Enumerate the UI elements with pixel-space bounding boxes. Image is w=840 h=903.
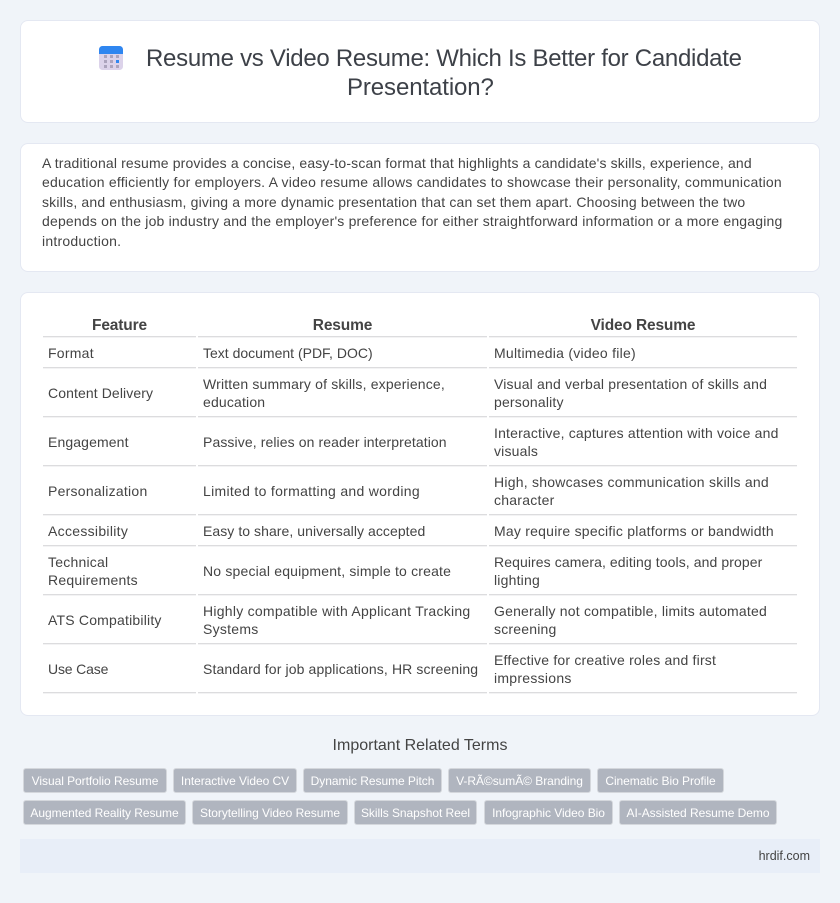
- ats compatibility: video resume: Generally not compatible, limits automated: [494, 603, 767, 619]
- tag: infographic video bio: Infographic Video Bio: [492, 806, 605, 820]
- tag: cinematic bio profile: Cinematic Bio Profile: [605, 774, 716, 788]
- intro text: depends on the job industry and the employer's preference for either straightforward information or a more engaging: [42, 213, 782, 229]
- content delivery: video resume: Visual and verbal presentation of skills and: [494, 376, 767, 392]
- tag: storytelling video resume: [192, 800, 348, 825]
- tag: storytelling video resume: Storytelling Video Resume: [200, 806, 340, 820]
- engagement: video resume: [494, 425, 779, 459]
- row: technical requirements: Requirements: [48, 572, 138, 588]
- intro text: education efficiently for employers. A video resume allows candidates to showcase their personality, communication: [42, 174, 782, 190]
- table header: feature: Feature: [92, 317, 147, 334]
- icon: calendar: [99, 46, 123, 70]
- row: technical requirements: Technical: [48, 554, 108, 570]
- content delivery: video resume: personality: [494, 394, 564, 410]
- row: format: Format: [48, 345, 94, 361]
- content delivery: video resume: [494, 376, 767, 410]
- row: ats compatibility: ATS Compatibility: [48, 612, 162, 628]
- technical requirements: video resume: [494, 554, 762, 588]
- intro text: introduction.: [42, 233, 121, 249]
- row: engagement: Engagement: [48, 434, 129, 450]
- personalization: resume: Limited to formatting and wording: [203, 483, 420, 499]
- footer bar: [20, 839, 820, 873]
- title: Resume vs Video Resume: Which Is Better for Candidate: [146, 45, 742, 72]
- accessibility: resume: Easy to share, universally accepted: [203, 523, 425, 539]
- ats compatibility: resume: [203, 603, 470, 637]
- tag: skills snapshot reel: [354, 800, 477, 825]
- tag: interactive video cv: [173, 768, 297, 793]
- intro text: skills, and enthusiasm, giving a more dynamic presentation that can set them apart. Choosing between the two: [42, 194, 745, 210]
- title: Presentation?: [347, 74, 494, 101]
- content delivery: resume: [203, 376, 445, 410]
- tag: visual portfolio resume: Visual Portfolio Resume: [32, 774, 158, 788]
- tag: dynamic resume pitch: Dynamic Resume Pitch: [311, 774, 434, 788]
- technical requirements: video resume: Requires camera, editing tools, and proper: [494, 554, 762, 570]
- technical requirements: video resume: lighting: [494, 572, 540, 588]
- use case: resume: Standard for job applications, HR screening: [203, 661, 478, 677]
- tag: ai-assisted resume demo: AI-Assisted Resume Demo: [627, 806, 769, 820]
- tag: infographic video bio: [484, 800, 613, 825]
- tag: ai-assisted resume demo: [619, 800, 777, 825]
- intro card: [20, 143, 820, 272]
- use case: video resume: [494, 652, 716, 686]
- related terms heading: Important Related Terms: [333, 737, 507, 754]
- row: accessibility: Accessibility: [48, 523, 128, 539]
- format: resume: Text document (PDF, DOC): [203, 345, 373, 361]
- engagement: video resume: Interactive, captures attention with voice and: [494, 425, 779, 441]
- ats compatibility: resume: Highly compatible with Applicant Tracking: [203, 603, 470, 619]
- tag: augmented reality resume: [23, 800, 186, 825]
- personalization: video resume: [494, 474, 769, 508]
- intro text: [42, 154, 782, 249]
- content delivery: resume: education: [203, 394, 265, 410]
- tag: interactive video cv: Interactive Video CV: [181, 774, 289, 788]
- ats compatibility: resume: Systems: [203, 621, 258, 637]
- footer: site name: hrdif.com: [759, 849, 810, 863]
- tag: augmented reality resume: Augmented Reality Resume: [30, 806, 179, 820]
- comparison table panel: [20, 292, 820, 716]
- row: use case: Use Case: [48, 661, 108, 677]
- engagement: resume: Passive, relies on reader interpretation: [203, 434, 447, 450]
- table header: resume: Resume: [313, 317, 372, 334]
- tag: visual portfolio resume: [23, 768, 167, 793]
- row: personalization: Personalization: [48, 483, 147, 499]
- personalization: video resume: character: [494, 492, 555, 508]
- ats compatibility: video resume: screening: [494, 621, 557, 637]
- ats compatibility: video resume: [494, 603, 767, 637]
- accessibility: video resume: May require specific platforms or bandwidth: [494, 523, 774, 539]
- header card: [20, 20, 820, 123]
- technical requirements: resume: No special equipment, simple to create: [203, 563, 451, 579]
- tag: v-resume branding: V-RÃ©sumÃ© Branding: [456, 774, 583, 788]
- personalization: video resume: High, showcases communication skills and: [494, 474, 769, 490]
- engagement: video resume: visuals: [494, 443, 538, 459]
- use case: video resume: Effective for creative roles and first: [494, 652, 716, 668]
- tag: skills snapshot reel: Skills Snapshot Reel: [361, 806, 470, 820]
- row: technical requirements: [48, 554, 138, 588]
- format: video resume: Multimedia (video file): [494, 345, 636, 361]
- related terms tags: [23, 768, 777, 825]
- content delivery: resume: Written summary of skills, experience,: [203, 376, 445, 392]
- row: content delivery: Content Delivery: [48, 385, 153, 401]
- tag: v-resume branding: [448, 768, 591, 793]
- tag: cinematic bio profile: [597, 768, 724, 793]
- table header: video resume: Video Resume: [591, 317, 695, 334]
- tag: dynamic resume pitch: [303, 768, 442, 793]
- use case: video resume: impressions: [494, 670, 572, 686]
- title: [146, 45, 742, 101]
- intro text: A traditional resume provides a concise, easy-to-scan format that highlights a candidate's skills, experience, and: [42, 154, 752, 170]
